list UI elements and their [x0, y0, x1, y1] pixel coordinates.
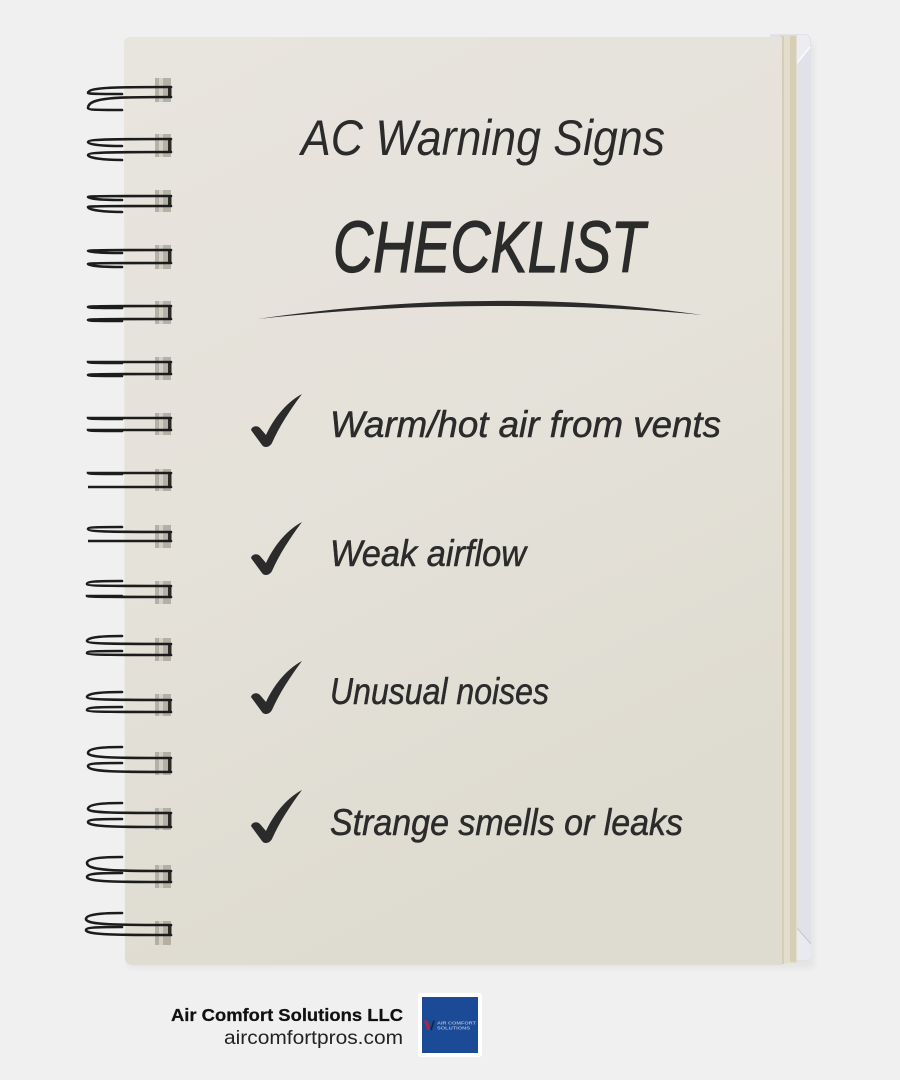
- ring 3: [88, 190, 172, 212]
- ring 1: [88, 78, 172, 110]
- notebook shadow: [128, 42, 814, 968]
- heading: checklist: CHECKLIST: [333, 208, 649, 288]
- ring 5: [88, 301, 172, 324]
- ring 9: [88, 525, 172, 548]
- ring 2: [88, 134, 172, 160]
- logo text: [437, 1020, 476, 1030]
- item text: Unusual noises: [330, 671, 549, 712]
- ring 10: [87, 581, 172, 604]
- ring 7: [88, 413, 172, 435]
- logo text: SOLUTIONS: [437, 1026, 470, 1030]
- item text: Weak airflow: [330, 533, 528, 574]
- logo: [418, 993, 482, 1057]
- notebook: [124, 34, 814, 968]
- ring 14: [88, 803, 172, 830]
- title: AC Warning Signs: [298, 110, 665, 166]
- icon: check mark: [251, 661, 302, 714]
- underline swoosh: [258, 301, 702, 319]
- logo mark: [424, 1020, 430, 1030]
- ring 13: [88, 747, 172, 775]
- icon: check mark: [251, 522, 302, 575]
- spiral binding: [86, 78, 172, 945]
- notebook page: [124, 37, 782, 965]
- ring 12: [87, 692, 172, 716]
- item text: Warm/hot air from vents: [330, 404, 721, 445]
- icon: check mark: [251, 394, 302, 447]
- ring 11: [87, 636, 172, 661]
- logo text: AIR COMFORT: [437, 1020, 476, 1026]
- ring 6: [88, 357, 172, 380]
- ring 4: [88, 245, 172, 269]
- footer company name: Air Comfort Solutions LLC: [171, 1005, 403, 1025]
- footer website: aircomfortpros.com: [224, 1027, 403, 1049]
- back cover: [770, 34, 811, 961]
- item text: Strange smells or leaks: [330, 802, 683, 843]
- ring 16: [86, 913, 172, 945]
- checklist item 1: [251, 394, 721, 447]
- ring 8: [88, 469, 172, 491]
- checklist item 3: [251, 661, 549, 714]
- page edges: [779, 35, 797, 964]
- checklist item 4: [251, 790, 683, 843]
- icon: check mark: [251, 790, 302, 843]
- ring 15: [87, 857, 172, 888]
- checklist item 2: [251, 522, 528, 575]
